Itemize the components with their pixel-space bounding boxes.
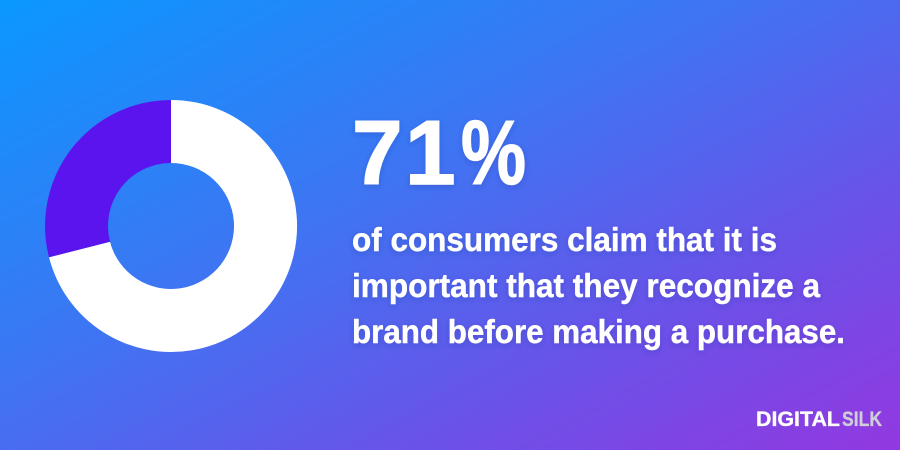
description text: of consumers claim that it is xyxy=(352,221,777,258)
description text xyxy=(352,221,845,350)
logo: Digital Silk: SILK xyxy=(842,408,882,431)
headline statistic: 1 xyxy=(405,103,456,204)
donut chart xyxy=(45,100,297,352)
donut segment: remaining 29% xyxy=(45,100,171,257)
headline statistic: 7 xyxy=(352,103,403,204)
logo: Digital Silk: DIGITAL xyxy=(756,408,840,431)
logo: Digital Silk xyxy=(756,408,882,431)
description text: important that they recognize a xyxy=(352,267,821,304)
donut segment: 71% xyxy=(49,100,297,352)
description text: brand before making a purchase. xyxy=(352,313,845,350)
headline statistic xyxy=(352,103,526,204)
headline statistic: % xyxy=(461,103,526,204)
